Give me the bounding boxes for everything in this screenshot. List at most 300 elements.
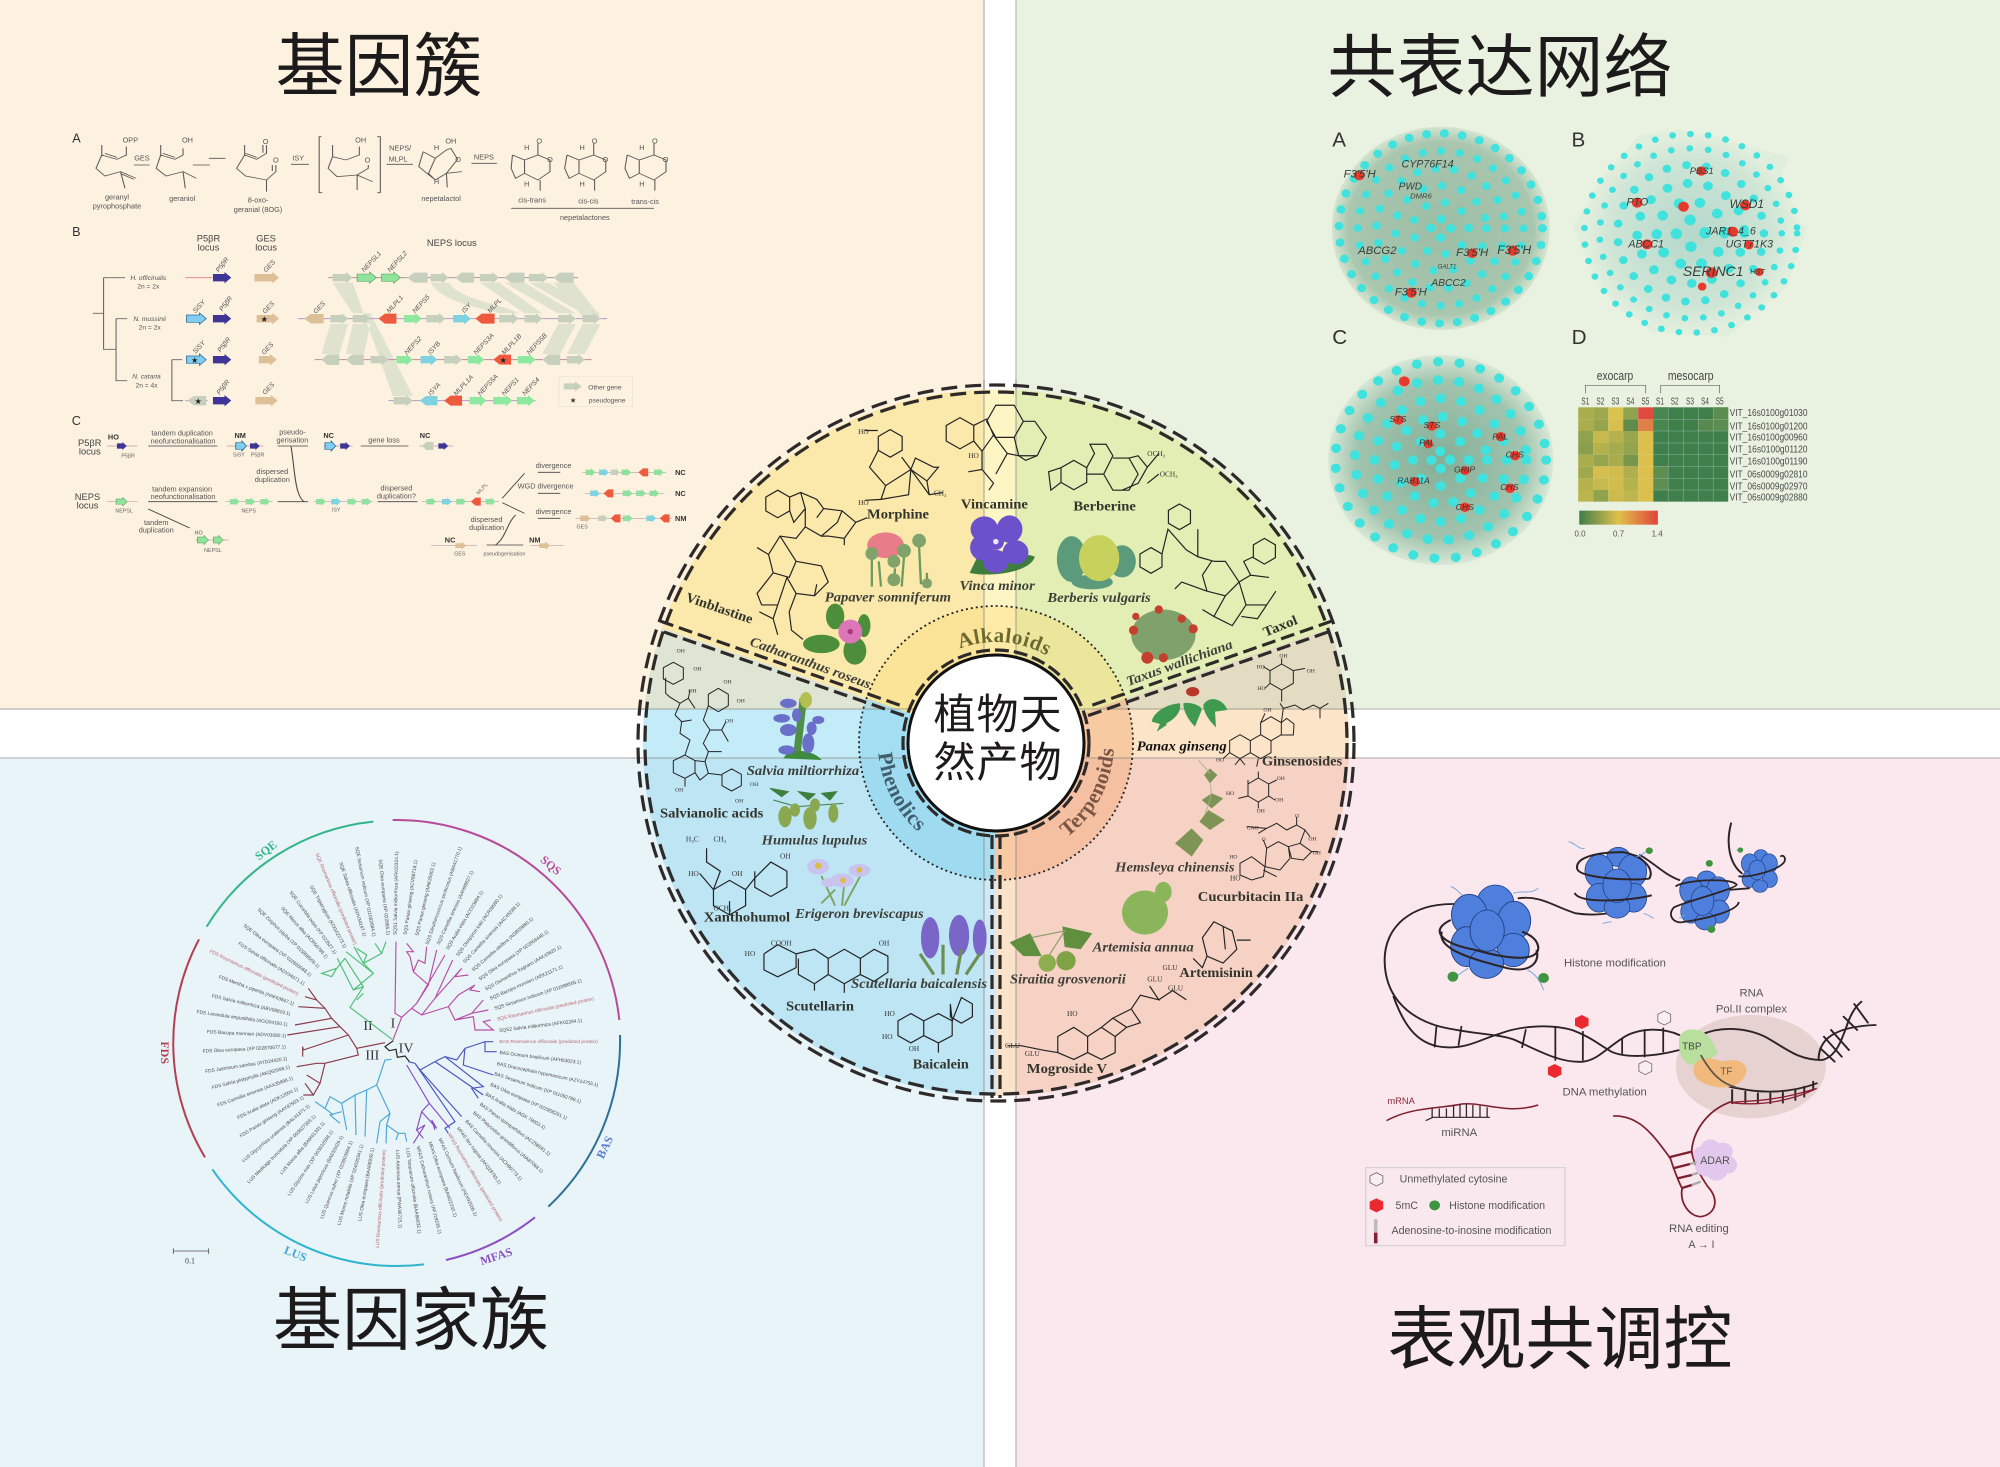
leaf labels: LUS Taraxacum officinale (BAA86932.1) xyxy=(404,1148,422,1234)
centre circle xyxy=(908,655,1084,831)
section C: evolution scenario: P5βR xyxy=(251,453,264,459)
leaf labels: BAS Camellia sinensis (ACH90773.1) xyxy=(464,1119,523,1182)
leaf labels: SQS Osmanthus fragrans (AAK43820.1) xyxy=(484,944,563,992)
plant: Vinca minor xyxy=(970,515,1035,575)
section A: nepetalactone pathway: nepetalactol xyxy=(421,194,461,203)
gene labels: GES xyxy=(312,300,327,315)
gene labels: P5βR xyxy=(218,295,234,313)
gene labels: NEPSL1 xyxy=(361,250,383,274)
section A: nepetalactone pathway: O xyxy=(365,155,371,164)
gene labels: NEPS3A xyxy=(473,332,496,356)
plant: Erigeron breviscapus xyxy=(807,859,870,906)
RNA editing with ADAR: A → I xyxy=(1688,1239,1714,1251)
leaf labels: SQS Eleutherococcus senticosus (ABA41770.1) xyxy=(425,846,464,946)
leaf labels: BAS Aralia elata (AGK 78003.1) xyxy=(484,1092,547,1131)
leaf labels: MFAS Olea europaea (BAW22232.1) xyxy=(426,1141,458,1218)
section A: nepetalactone pathway: H xyxy=(524,143,529,152)
centre title: 然产物 xyxy=(933,739,1063,786)
panel: gene clusters xyxy=(0,0,984,709)
section C: evolution scenario: duplication? xyxy=(377,492,416,501)
red genes xyxy=(379,314,511,406)
leaf labels: FDS Panax ginseng (AAY87903.1) xyxy=(239,1095,305,1139)
leaf labels: SQE Rosmarinus officinalis (predicted protein) xyxy=(313,852,358,946)
small molecule labels: CH₃ xyxy=(713,834,727,843)
section C: evolution scenario: P5βR xyxy=(121,453,135,459)
leaf labels: LUS Lotus japonicus (BAE53429.1) xyxy=(304,1134,345,1205)
plant: Scutellaria baicalensis xyxy=(920,915,987,975)
fine detail: ginsenosides and cucurbitacin: HO xyxy=(1257,686,1266,692)
section A: nepetalactone pathway: H xyxy=(524,180,529,189)
leaf labels: SQS Bacopa monnieri (AEK21171.1) xyxy=(489,964,564,1002)
section A: nepetalactone pathway: H xyxy=(434,177,439,186)
plant: Artemisia annua xyxy=(1122,882,1172,935)
compound and species labels: Artemisia annua xyxy=(1092,940,1194,955)
network A: ABCC2 xyxy=(1430,278,1466,289)
title: gene family: 基因家族 xyxy=(273,1282,549,1359)
network A: F3'5'H xyxy=(1497,243,1532,257)
compound and species labels xyxy=(660,497,1343,1076)
heatmap D: S4 xyxy=(1701,397,1709,408)
gene labels: NEPS4 xyxy=(521,376,542,397)
gene labels: P5βR xyxy=(215,256,231,274)
fine detail: ginsenosides and cucurbitacin: O xyxy=(1262,837,1266,843)
section A: nepetalactone pathway: cis-trans xyxy=(518,196,546,205)
Pol II complex halo xyxy=(1676,1015,1826,1118)
heatmap D: VIT_16s0100g01120 xyxy=(1730,444,1808,456)
panel edges through wheel xyxy=(640,380,1356,1100)
compound and species labels: Salvia miltiorrhiza xyxy=(747,763,859,778)
section C: evolution scenario: locus xyxy=(79,447,101,457)
legend: Histone modification xyxy=(1449,1200,1545,1212)
section B: gene loci synteny: 2n = 4x xyxy=(136,382,158,389)
gene labels: NEPS5 xyxy=(411,294,432,315)
leaf labels: LUS Medicago truncatula (XP 003627305.1) xyxy=(246,1114,318,1185)
legend: other gene and pseudogene: pseudogene xyxy=(589,398,626,405)
small molecule labels: HO xyxy=(1230,873,1241,882)
heatmap D: S1 xyxy=(1656,397,1664,408)
legend: 5mC xyxy=(1396,1200,1418,1212)
section C: evolution scenario: gene loss xyxy=(368,436,400,445)
gene labels: NEPS1 xyxy=(501,376,521,397)
synteny ribbons xyxy=(321,283,600,396)
miRNA binding xyxy=(1386,1096,1538,1139)
network C: PAL xyxy=(1492,431,1508,441)
section C: evolution scenario: NEPSL xyxy=(204,548,222,554)
network C: CHS xyxy=(1506,449,1524,459)
small molecule labels: HO xyxy=(968,451,979,460)
heatmap D: VIT_06s0009g02970 xyxy=(1730,481,1808,492)
heatmap colour scale: 1.4 xyxy=(1652,530,1663,539)
phylogeny xyxy=(93,278,183,401)
nucleosome: second xyxy=(1575,847,1652,918)
section C: evolution scenario: P5βR xyxy=(78,438,102,448)
plant: Humulus lupulus detail xyxy=(770,788,843,830)
network B: SERINC1 xyxy=(1683,263,1744,279)
network C: GRIP xyxy=(1454,465,1475,475)
gene labels: MLPL xyxy=(486,297,504,315)
gene labels: GES xyxy=(261,341,276,356)
leaf labels: BAS Dracocephala hypomanicum (AZV14755.1) xyxy=(496,1061,599,1089)
leaf labels: SQE Olea europaea (XP 022855068.1) xyxy=(242,923,313,978)
section C: evolution scenario: divergence xyxy=(536,507,571,516)
fine detail: salvianolic acids: OH xyxy=(750,782,758,788)
heatmap D: D xyxy=(1572,326,1587,349)
title: co-expression network: 共表达网络 xyxy=(1328,29,1672,106)
network A: GALT1 xyxy=(1438,265,1456,271)
leaf labels: FDS Olea europaea (XP 022870677.1) xyxy=(203,1044,286,1055)
section C: evolution scenario: dispersed xyxy=(256,467,288,476)
section C: evolution scenario: duplication xyxy=(255,475,290,484)
section C: evolution scenario: NC xyxy=(445,535,456,544)
heatmap D: VIT_16s0100g01190 xyxy=(1730,456,1808,468)
legend: Unmethylated cytosine xyxy=(1400,1173,1508,1185)
leaf labels: FDS Mentha x piperita (AAK63847.1) xyxy=(218,974,295,1007)
section A: nepetalactone pathway: H xyxy=(434,143,439,152)
section A: nepetalactone pathway: GES xyxy=(134,154,150,163)
section A: nepetalactone pathway: cis-cis xyxy=(578,196,599,205)
section A: nepetalactone pathway: H xyxy=(579,143,585,152)
leaf labels: LUS Olea europaea (BAA86930.1) xyxy=(357,1147,376,1222)
section C: evolution scenario: duplication xyxy=(469,523,504,532)
heatmap D: mesocarp xyxy=(1668,368,1714,383)
fine detail: salvianolic acids: OH xyxy=(735,799,743,805)
network B: B xyxy=(1572,129,1585,152)
heatmap D: S2 xyxy=(1596,397,1604,408)
leaf labels: SQE Ziziphus jujuba (XP 015868509.1) xyxy=(256,907,321,970)
leaf labels: SQE Tripterygium (KOG62273.1) xyxy=(308,884,348,950)
compound and species labels: Papaver somniferum xyxy=(825,589,951,604)
section C: evolution scenario: GES xyxy=(577,525,588,531)
plant: Papaver somniferum xyxy=(865,532,932,588)
fine detail: ginsenosides and cucurbitacin: OH xyxy=(1257,809,1265,815)
legend: other gene and pseudogene xyxy=(559,377,633,407)
network A: F3'5'H xyxy=(1344,168,1377,180)
network C: PAL xyxy=(1419,437,1435,447)
morphine xyxy=(865,430,943,500)
label: RNA Pol II complex xyxy=(1716,988,1787,1016)
section A: nepetalactone pathway: 8-oxo- xyxy=(248,196,269,205)
section C: evolution scenario: HO xyxy=(195,531,203,537)
RNA editing with ADAR: ADAR xyxy=(1700,1155,1730,1167)
clade arcs xyxy=(173,820,620,1266)
fine detail: ginsenosides and cucurbitacin: O xyxy=(1295,814,1299,820)
structures: alkaloids xyxy=(700,405,1276,1059)
vincamine xyxy=(946,405,1046,490)
fine detail: salvianolic acids: OH xyxy=(737,699,745,705)
section C: evolution scenario: C xyxy=(72,414,81,428)
sector names: Phenolics xyxy=(878,752,924,830)
network B: PBS1 xyxy=(1690,166,1714,176)
leaf labels: FDS Bacopa monnieri (ADV03080.1) xyxy=(207,1029,287,1039)
fine detail: salvianolic acids: OH xyxy=(725,719,733,725)
section A: nepetalactone pathway: ISY xyxy=(292,154,304,163)
leaf labels: BAS Platycodon grandiflorus (AIA87068.1) xyxy=(471,1110,544,1175)
compound and species labels: Vinca minor xyxy=(960,578,1036,593)
leaf labels: SQE Olea europaea (XP 022865.1) xyxy=(377,859,391,936)
leaf labels: SQS Rosmarinus officinalis (predicted protein) xyxy=(496,996,595,1023)
fine detail: ginsenosides and cucurbitacin: OH xyxy=(1307,669,1315,675)
compound and species labels: Hemsleya chinensis xyxy=(1114,860,1235,875)
compound and species labels: Taxol xyxy=(1261,612,1300,640)
section A: nepetalactone pathway: pyrophosphate xyxy=(93,201,141,210)
section A: nepetalactone pathway: OH xyxy=(355,136,366,145)
section B: gene loci synteny: 2n = 2x xyxy=(137,284,160,291)
clade names: BAS xyxy=(593,1133,616,1161)
heatmap D: VIT_16s0100g01030 xyxy=(1730,407,1808,419)
scale bar xyxy=(173,1248,209,1265)
small molecule labels: OH xyxy=(732,869,743,878)
vinblastine xyxy=(757,490,867,639)
plant: Berberis vulgaris xyxy=(1057,535,1136,589)
fine detail: salvianolic acids: OH xyxy=(675,788,683,794)
section C: evolution scenario: NEPS xyxy=(75,492,100,502)
leaf labels: SQS2 Salvia miltiorrhiza (AFK02284.1) xyxy=(499,1018,583,1034)
section C: evolution scenario: WGD divergence xyxy=(518,482,573,491)
fine detail: ginsenosides and cucurbitacin: HO xyxy=(1226,791,1234,797)
section B: gene loci synteny: B xyxy=(72,225,81,239)
compound and species labels: Baicalein xyxy=(913,1057,969,1072)
section C: evolution scenario: NEPSL xyxy=(115,509,133,515)
small molecule labels: COOH xyxy=(771,939,792,948)
fine detail: ginsenosides and cucurbitacin: HO xyxy=(1216,758,1224,764)
heatmap D: S3 xyxy=(1611,397,1619,408)
leaf labels: BAS Ocimum basilicum (AFH63023.1) xyxy=(499,1050,582,1066)
fine detail: ginsenosides and cucurbitacin: OH xyxy=(1277,776,1285,782)
gene labels: SiSY xyxy=(192,339,207,355)
sector names: Terpenoids xyxy=(1058,749,1114,836)
histone tails and marks xyxy=(1447,842,1743,990)
section C: evolution scenario: NC xyxy=(675,468,686,477)
leaf labels: LUS Glycine max (XP 003532558.1) xyxy=(287,1129,335,1197)
label: RNA Pol II complex: RNA xyxy=(1739,988,1764,1000)
section A: nepetalactone pathway: A xyxy=(72,132,81,146)
section A: nepetalactone pathway: O xyxy=(547,155,553,164)
small molecule labels: GLU xyxy=(1168,984,1184,993)
diagram: biosynthesis, loci and evolution xyxy=(72,132,686,557)
network B: JAR1_4_6 xyxy=(1705,226,1756,238)
taxol xyxy=(1140,504,1276,626)
heatmap D: VIT_16s0100g01200 xyxy=(1730,421,1808,432)
sector: alkaloids xyxy=(662,389,1330,714)
section B: gene loci synteny: ★ xyxy=(191,357,198,364)
section A: nepetalactone pathway: nepetalactones xyxy=(560,213,610,222)
section C: evolution scenario: SiSY xyxy=(233,453,245,459)
clade numerals: II xyxy=(363,1019,373,1034)
compound and species labels: Siraitia grosvenorii xyxy=(1010,972,1126,987)
section A: nepetalactone pathway: MLPL xyxy=(389,154,408,163)
wheel contents xyxy=(660,405,1343,1076)
heatmap D: exocarp xyxy=(1597,368,1633,383)
small molecule labels: HO xyxy=(745,949,755,958)
plant: Catharanthus roseus xyxy=(803,604,870,665)
section A: nepetalactone pathway: O xyxy=(273,156,279,165)
leaf labels: FDS Rosmarinus officinalis (predicted protein) xyxy=(208,949,300,997)
fine detail: ginsenosides and cucurbitacin: CAO xyxy=(1247,825,1259,831)
compound and species labels: Vincamine xyxy=(961,497,1028,512)
section B: gene loci synteny: GES xyxy=(256,234,276,244)
small molecule labels: HO xyxy=(858,498,869,507)
nucleosome: large xyxy=(1451,885,1531,978)
section B: gene loci synteny: locus xyxy=(255,243,277,253)
panel: co-expression network xyxy=(1016,0,2000,709)
heatmap D: S3 xyxy=(1686,397,1694,408)
network A: CYP76F14 xyxy=(1402,159,1454,171)
section A: nepetalactone pathway: H xyxy=(639,180,645,189)
section A: nepetalactone pathway: NEPS/ xyxy=(389,144,412,153)
fine detail: ginsenosides and cucurbitacin xyxy=(1152,653,1328,880)
tan GES genes xyxy=(254,272,324,406)
protein: TF: TF xyxy=(1720,1067,1733,1078)
small molecule labels: OH xyxy=(879,939,890,948)
section C: evolution scenario: neofunctionalisation xyxy=(151,492,215,501)
central wheel: plant natural products xyxy=(636,380,1356,1103)
track lines xyxy=(185,276,212,279)
section C: evolution scenario: HO xyxy=(108,433,119,442)
fine detail: ginsenosides and cucurbitacin: OH xyxy=(1263,708,1272,714)
RNA editing with ADAR: RNA editing xyxy=(1669,1223,1729,1235)
label: RNA Pol II complex: Pol.II complex xyxy=(1716,1004,1787,1016)
sector names: Alkaloids xyxy=(960,628,1050,654)
leaf labels: SQE Salvia officinalis (ADV34147.1) xyxy=(337,861,367,938)
section C: evolution scenario: neofunctionalisation xyxy=(151,436,215,445)
section A: nepetalactone pathway: trans-cis xyxy=(631,197,659,206)
small molecule labels xyxy=(686,427,1241,1058)
nucleosome: fourth xyxy=(1738,850,1785,892)
grey genes xyxy=(187,272,600,406)
compound and species labels: Erigeron breviscapus xyxy=(794,906,924,921)
network B xyxy=(1572,129,1807,337)
DNA strands xyxy=(1385,823,1876,1104)
compound and species labels: Humulus lupulus xyxy=(761,833,867,848)
compound and species labels: Salvianolic acids xyxy=(660,806,764,821)
section B: gene loci synteny: P5βR xyxy=(197,234,221,244)
gene labels: GES xyxy=(262,300,277,315)
leaf labels: SQS Panax ginseng (ACV88718.1) xyxy=(403,859,419,935)
section A: nepetalactone pathway: H xyxy=(579,180,585,189)
fine detail: salvianolic acids: OH xyxy=(688,688,697,694)
gene labels: MLPL1A xyxy=(453,374,475,397)
leaf labels: FDS Aralia elata (ADK12004.1) xyxy=(237,1086,300,1121)
leaf labels: SQS Aralia elata (ACD23894.1) xyxy=(445,890,485,951)
legend: Adenosine-to-inosine modification xyxy=(1391,1225,1551,1237)
network A xyxy=(1332,127,1550,330)
section C: evolution scenario: locus xyxy=(77,501,99,511)
clade numerals: III xyxy=(365,1048,380,1063)
legend: other gene and pseudogene: Other gene xyxy=(588,384,622,391)
leaf labels: FDS Lavandula angustifolia (AGQ04160.1) xyxy=(196,1009,288,1028)
section B: gene loci synteny: ★ xyxy=(500,357,507,364)
leaf labels: SQS Panax ginseng (AAK35902.1) xyxy=(414,861,437,936)
clade names: MFAS xyxy=(478,1244,514,1268)
section B: gene loci synteny: locus xyxy=(198,243,220,253)
compound and species labels: Berberine xyxy=(1073,498,1136,513)
small molecule labels: H₃C xyxy=(686,834,699,843)
plant: Panax ginseng detail xyxy=(1152,687,1227,732)
clade names: FDS xyxy=(158,1041,172,1064)
plant: Salvia miltiorrhiza detail xyxy=(773,692,824,760)
section C: evolution scenario: dispersed xyxy=(471,515,502,524)
compound and species labels: Ginsenosides xyxy=(1262,754,1343,769)
section C: evolution scenario: pseudogenisation xyxy=(484,551,525,557)
small molecule labels: HO xyxy=(884,1009,895,1018)
miRNA binding: miRNA xyxy=(1441,1127,1478,1139)
leaf labels: SQS1 Salvia miltiorrhiza (AFK02324.1) xyxy=(393,851,400,935)
clade names: LUS xyxy=(282,1243,309,1265)
section C: evolution scenario: duplication xyxy=(139,526,174,535)
small molecule labels: OCH₃ xyxy=(713,903,732,912)
network B: UGT71K3 xyxy=(1726,238,1773,250)
gene labels: ISYA xyxy=(427,381,443,397)
compound and species labels: Vinblastine xyxy=(684,590,755,627)
compound and species labels: Artemisinin xyxy=(1179,965,1253,980)
compound and species labels: Catharanthus roseus xyxy=(748,634,873,692)
leaf labels: LUS Rosmarinus officinalis (predicted protein) xyxy=(375,1149,388,1248)
compound and species labels: Panax ginseng xyxy=(1137,738,1227,753)
network B: PTO xyxy=(1626,196,1648,208)
section C: evolution scenario: ISY xyxy=(332,507,341,513)
centre title xyxy=(933,691,1063,786)
plant: Taxus wallichiana xyxy=(1129,605,1198,664)
network A: A xyxy=(1332,129,1346,152)
network C: CHS xyxy=(1456,502,1474,512)
branches xyxy=(287,942,497,1143)
network C: STS xyxy=(1423,420,1441,430)
gene labels: NEPSL2 xyxy=(386,250,409,274)
gene labels: P5βR xyxy=(217,336,233,354)
gene labels: GES xyxy=(262,381,277,396)
navy P5bR genes xyxy=(213,272,231,406)
fine detail: ginsenosides and cucurbitacin: OH xyxy=(1308,837,1317,843)
leaf labels: SQE Cucurbita pepo (XP 023527.1) xyxy=(288,890,338,956)
sector: terpenoids xyxy=(996,628,1350,1096)
compound and species labels: Morphine xyxy=(867,507,929,522)
leaf labels: SQS Camellia sinensis (AAH88827.1) xyxy=(436,870,476,946)
fine detail: ginsenosides and cucurbitacin: OH xyxy=(1275,798,1283,804)
section A: nepetalactone pathway: geranial (8OG) xyxy=(234,205,282,214)
section A: nepetalactone pathway: O xyxy=(652,136,658,145)
clade names: SQS xyxy=(538,853,564,878)
protein: TBP xyxy=(1679,1029,1719,1065)
leaf labels: BAS Panax quinquefolius (ACZ58041.1) xyxy=(478,1102,552,1157)
centre title: 植物天 xyxy=(933,691,1063,738)
network C: CHS xyxy=(1500,482,1519,492)
heatmap D: S5 xyxy=(1641,397,1649,408)
heatmap colour scale: 0.7 xyxy=(1613,530,1625,539)
gene labels: SiSY xyxy=(192,299,207,315)
section B: gene loci synteny: ★ xyxy=(195,398,202,405)
small molecule labels: OCH₃ xyxy=(1160,469,1178,478)
leaf labels: LUS Quercus suber (XP 023903564.1) xyxy=(319,1140,355,1220)
network B: WSD1 xyxy=(1729,197,1764,211)
clade numerals: IV xyxy=(399,1042,413,1057)
title: epigenetic co-regulation: 表观共调控 xyxy=(1388,1301,1732,1378)
section C: evolution scenario: GES xyxy=(454,551,466,557)
gene labels: ISY xyxy=(461,302,473,315)
section A: nepetalactone pathway: OH xyxy=(445,137,456,146)
compound and species labels: Taxus wallichiana xyxy=(1124,636,1235,689)
gene labels: NEPS5B xyxy=(526,332,549,356)
section C: evolution scenario: pseudo- xyxy=(279,428,306,437)
heatmap D: S1 xyxy=(1581,397,1589,408)
title: gene cluster: 基因簇 xyxy=(276,28,482,105)
small molecule labels: OCH₃ xyxy=(1147,449,1166,458)
label: histone modification: Histone modification xyxy=(1564,958,1666,970)
structures: artemisinin and mogroside xyxy=(1193,922,1251,968)
section A: nepetalactone pathway: O xyxy=(603,155,609,164)
heatmap colour scale: 0.0 xyxy=(1574,530,1586,539)
gene labels: MLPL1B xyxy=(501,333,524,356)
leaf labels xyxy=(196,846,599,1248)
